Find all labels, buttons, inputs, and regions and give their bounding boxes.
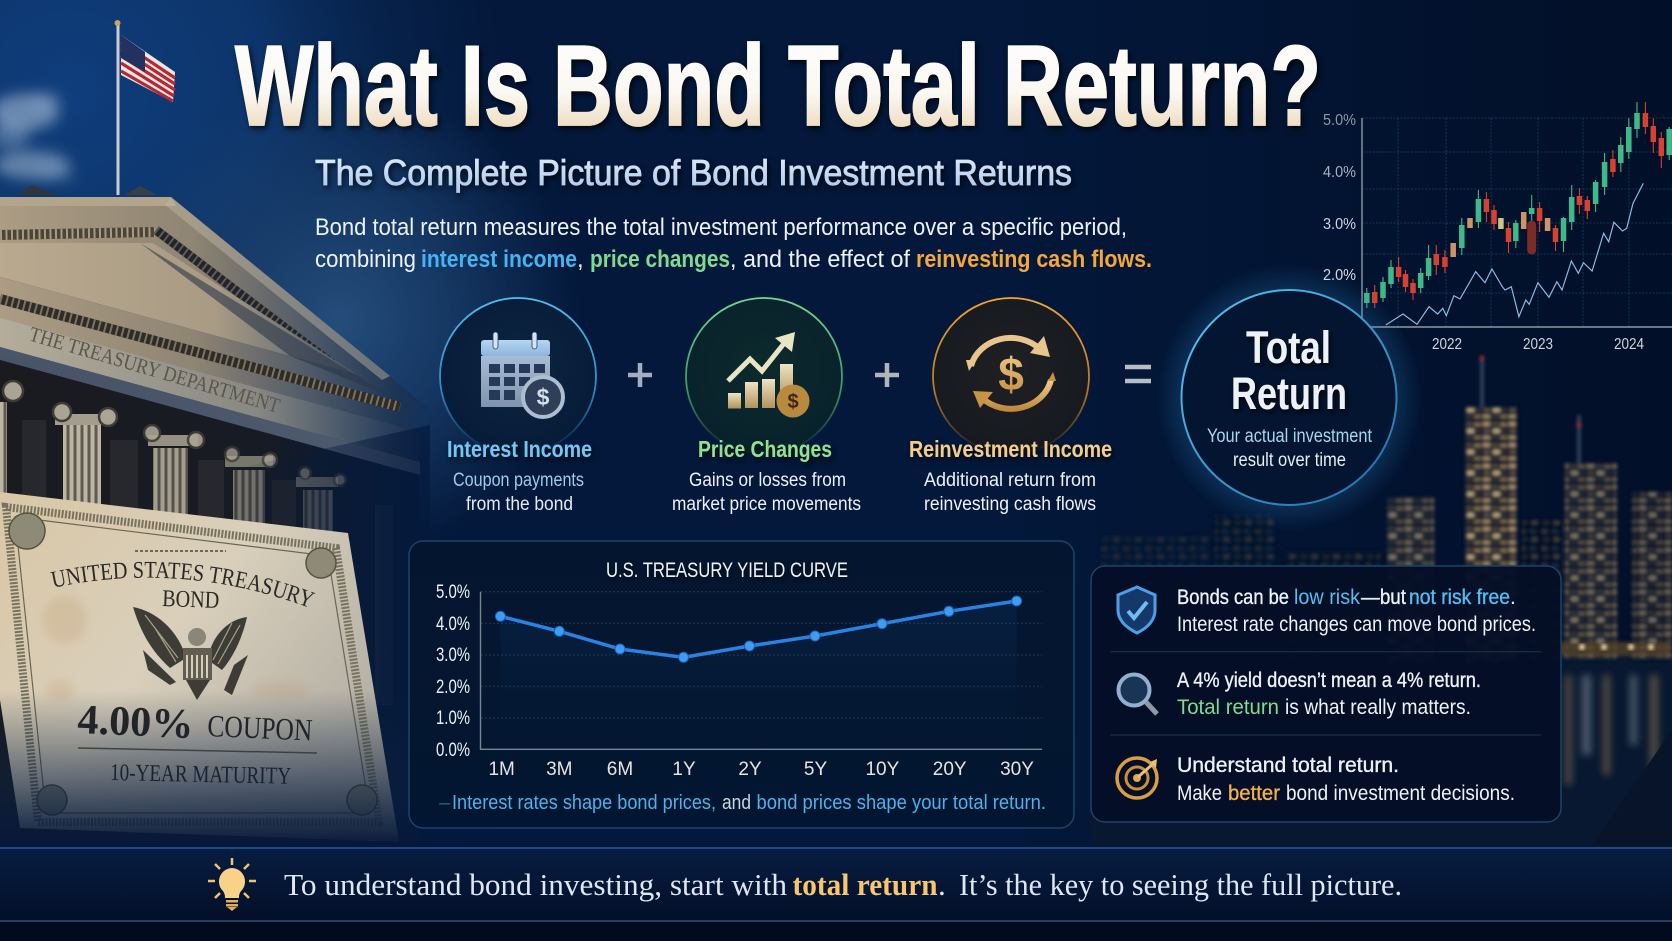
icon: target [1117, 758, 1157, 798]
takeaway: risk: . [1510, 586, 1516, 609]
heading: Total [1246, 322, 1331, 373]
chart title: U.S. TREASURY YIELD CURVE [606, 559, 848, 582]
skyline with water reflection [1090, 356, 1672, 848]
takeaway: yield vs return: A 4% yield doesn’t mean a 4% return. [1177, 669, 1481, 692]
icon: light bulb [208, 858, 256, 911]
plus sign [875, 363, 899, 387]
icon: circular arrows and dollar: $ [998, 348, 1024, 400]
candlestick chart with axes: 2.0% [1323, 267, 1356, 284]
x axis labels: 30Y [1000, 759, 1034, 780]
chart caption: and [722, 792, 751, 814]
heading [1231, 322, 1347, 419]
y axis labels: 3.0% [436, 645, 470, 666]
takeaway: risk [1177, 586, 1536, 636]
component: interest income [440, 298, 596, 515]
candlestick chart with axes: 4.0% [1323, 164, 1356, 181]
intro paragraph: Bond total return measures the total investment performance over a specific period, [315, 214, 1127, 241]
component: price changes [672, 298, 861, 515]
y axis labels: 1.0% [436, 708, 470, 729]
y axis labels: 5.0% [436, 582, 470, 603]
caption: result over time [1233, 450, 1346, 471]
x axis labels: 1M [488, 759, 515, 780]
description [924, 470, 1096, 515]
takeaway: decisions: Make [1177, 782, 1222, 805]
y axis labels: 0.0% [436, 740, 470, 761]
key message: To understand bond investing, start with [284, 867, 788, 902]
icon: shield [1118, 587, 1155, 633]
clouds [0, 92, 75, 181]
coupon label: COUPON [207, 708, 313, 748]
takeaway: decisions [1177, 754, 1515, 805]
intro paragraph: reinvesting cash flows. [916, 246, 1152, 273]
y axis labels [436, 582, 470, 761]
treasury building [0, 185, 430, 848]
icon: chart and coin [728, 332, 810, 418]
takeaway: decisions: bond investment decisions. [1286, 782, 1515, 805]
description: Gains or losses from [689, 470, 846, 491]
y axis labels: 2.0% [436, 677, 470, 698]
icon: magnifier [1118, 674, 1157, 714]
key message: . [938, 867, 946, 902]
component: reinvestment income [909, 298, 1112, 515]
takeaway: decisions: better [1228, 782, 1280, 805]
candlestick chart with axes: 2022 [1432, 336, 1462, 353]
icon: calendar with coin: $ [537, 384, 550, 410]
chart caption: Interest rates shape bond prices, [452, 792, 716, 814]
key message: total return [792, 867, 938, 902]
intro paragraph: , and the effect of [730, 246, 910, 273]
candlestick chart with axes: 3.0% [1323, 216, 1356, 233]
inscription: the treasury department: THE TREASURY DEPARTMENT [27, 322, 283, 418]
y axis labels: 4.0% [436, 614, 470, 635]
bond heading: BOND [162, 586, 220, 614]
result circle: total return [1155, 264, 1423, 532]
intro paragraph: price changes [590, 246, 730, 273]
takeaway: risk: Bonds can be [1177, 586, 1289, 609]
heading: Return [1231, 368, 1347, 419]
x axis labels: 20Y [933, 759, 967, 780]
bond heading: UNITED STATES TREASURY [50, 562, 316, 607]
x axis labels: 3M [546, 759, 573, 780]
panel: key takeaways [1091, 566, 1561, 822]
coupon rate: 4.00% [77, 697, 194, 748]
x axis labels: 10Y [865, 759, 900, 780]
takeaway: risk: Interest rate changes can move bond prices. [1177, 613, 1536, 636]
description: Additional return from [924, 470, 1096, 491]
chart caption: – [439, 792, 451, 814]
chart caption [439, 792, 1046, 814]
label: Reinvestment Income [909, 436, 1112, 462]
yield line with points [495, 596, 1022, 662]
equals sign [1125, 367, 1151, 381]
footer band [0, 848, 1672, 941]
x axis labels: 1Y [672, 759, 696, 780]
icon: chart and coin: $ [787, 391, 799, 413]
takeaway: yield vs return: Total return [1177, 696, 1279, 719]
icon: circular arrows and dollar [966, 336, 1056, 409]
candlestick chart with axes: 2023 [1523, 336, 1553, 353]
key message: It’s the key to seeing the full picture. [959, 867, 1402, 902]
x axis labels: 2Y [738, 759, 762, 780]
chart caption: bond prices shape your total return. [756, 792, 1046, 814]
x axis labels [488, 759, 1034, 780]
eagle seal [133, 607, 248, 700]
icon: calendar with coin [481, 332, 563, 417]
description [672, 470, 861, 515]
takeaway: yield vs return: is what really matters. [1285, 696, 1471, 719]
x axis labels: 5Y [804, 759, 827, 780]
key message [284, 867, 1402, 902]
caption: Your actual investment [1207, 426, 1373, 447]
candlestick chart with axes [1323, 102, 1672, 353]
maturity: 10-YEAR MATURITY [110, 760, 291, 790]
takeaway: risk: —but [1361, 586, 1406, 609]
intro paragraph: combining [315, 246, 416, 273]
description: market price movements [672, 494, 861, 515]
takeaway: decisions: Understand total return. [1177, 754, 1399, 777]
description [453, 470, 584, 515]
takeaway: risk: low risk [1294, 586, 1360, 609]
description: from the bond [466, 494, 573, 515]
bond certificate [0, 492, 398, 847]
candlestick chart with axes: 2024 [1614, 336, 1644, 353]
columns [0, 381, 393, 705]
description: Coupon payments [453, 470, 584, 491]
takeaway: risk: not risk free [1409, 586, 1510, 609]
panel: yield curve chart [409, 541, 1074, 828]
x axis labels: 6M [607, 759, 633, 780]
flag and pole [114, 20, 175, 195]
caption [1207, 426, 1373, 471]
intro paragraph: , [577, 246, 584, 273]
label: Interest Income [447, 436, 592, 462]
intro paragraph: interest income [421, 246, 577, 273]
description: reinvesting cash flows [924, 494, 1096, 515]
intro paragraph [315, 214, 1152, 273]
label: Price Changes [698, 436, 832, 462]
takeaway: yield vs return [1177, 669, 1481, 719]
plus sign [628, 363, 652, 387]
subtitle: The Complete Picture of Bond Investment Returns [315, 152, 1072, 193]
candlestick chart with axes: 5.0% [1323, 112, 1356, 129]
